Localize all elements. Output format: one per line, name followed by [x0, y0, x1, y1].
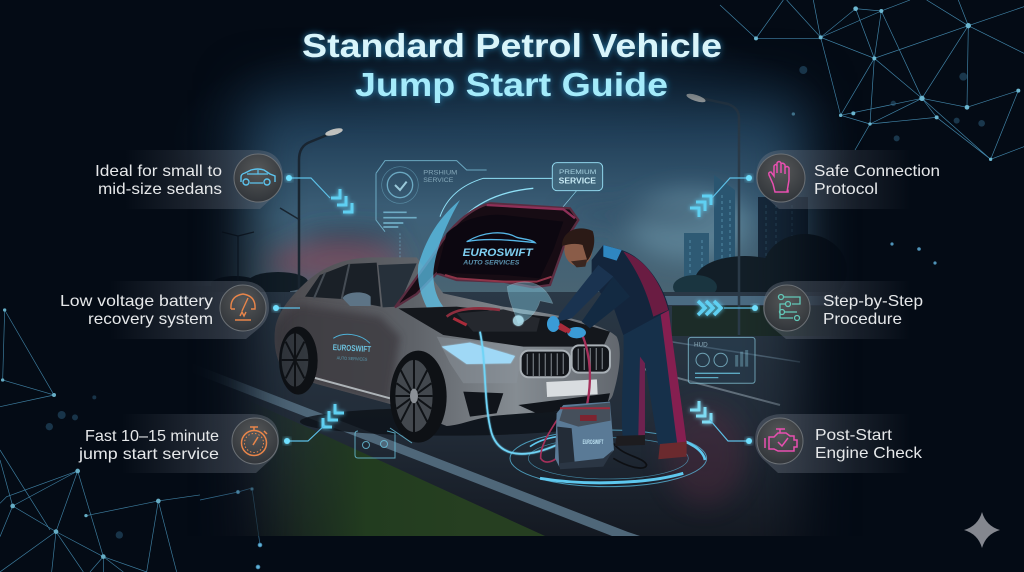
title: Jump Start Guide: [355, 66, 668, 103]
text: safe connection: [814, 163, 940, 198]
gloves: [547, 316, 560, 332]
lower intakes: [463, 392, 503, 417]
jump starter box: [555, 402, 614, 469]
lane line: [640, 368, 780, 405]
icon: gauge: [220, 285, 266, 331]
windshield: [378, 263, 417, 307]
street light right: [686, 92, 739, 335]
HUD panel: right gauges: [688, 337, 755, 383]
hood logo: [467, 233, 535, 243]
open hood: [395, 203, 578, 307]
icon: car: [234, 154, 282, 202]
chevrons: upper right: [690, 196, 711, 217]
HUD panel: right gauges: HUD: [694, 342, 708, 349]
front wheel: [390, 351, 447, 443]
panel: small to mid-size sedans: [95, 150, 283, 209]
floor rings: [510, 430, 707, 487]
road edge stripe: [222, 376, 640, 536]
grass: [281, 416, 544, 536]
engine bay: [398, 307, 610, 347]
holographic ribbon: [418, 200, 553, 326]
panel: low voltage battery: [60, 281, 269, 339]
body shading: [275, 305, 400, 404]
city buildings: [684, 175, 808, 283]
head: [564, 233, 592, 266]
text: sedans: [95, 163, 222, 198]
scene: roadside illustration: [214, 74, 834, 536]
central glow: [172, 15, 852, 265]
car shadow: [300, 408, 558, 436]
network: bottom centre-left dots: [200, 488, 294, 572]
road surface: [214, 292, 821, 536]
jump starter box: EUROSWIFT: [583, 439, 603, 446]
open hood: AUTO SERVICES: [462, 259, 520, 266]
building windows: [690, 195, 792, 280]
text: safe connection: Safe Connection: [814, 163, 940, 180]
car body: [275, 257, 620, 426]
text: fast: [78, 428, 219, 463]
chevrons: upper left: [331, 189, 352, 212]
chevrons: middle right: [698, 301, 721, 315]
side windows: [305, 263, 381, 307]
panel: step-by-step: [763, 281, 923, 339]
door logo: EUROSWIFT: [333, 342, 371, 354]
connector: left 2: [273, 305, 300, 311]
legs: [622, 307, 687, 445]
icon: stopwatch: [232, 418, 278, 464]
icon: engine: [757, 418, 803, 464]
arms: [557, 265, 613, 322]
HUD panel: premium service: [376, 160, 487, 258]
connector: right 3: [710, 420, 752, 444]
door logo: AUTO SERVICES: [337, 355, 368, 362]
engine red clamps: [453, 318, 567, 332]
text: engine check: Engine Check: [815, 445, 923, 462]
panel: engine check: [755, 414, 923, 473]
text: fast: Fast 10–15 minute: [85, 428, 219, 445]
number plate: [546, 379, 598, 397]
icon: glove: [757, 154, 805, 202]
HUD panel: premium service: PRSHIUM: [423, 169, 457, 176]
title: Standard Petrol Vehicle: [302, 27, 722, 64]
shoes: [615, 435, 645, 446]
text: battery: recovery system: [88, 311, 213, 328]
text: fast: jump start service: [78, 446, 219, 463]
door logo: [333, 334, 371, 362]
text: step-by-step: Procedure: [823, 311, 902, 328]
text: step-by-step: [823, 293, 923, 328]
technician: [547, 228, 687, 459]
tree line: [219, 234, 831, 292]
HUD badge: premium service: SERVICE: [559, 176, 597, 185]
rear wheel: [279, 327, 318, 395]
text: engine check: Post-Start: [815, 427, 893, 444]
car: [275, 200, 620, 443]
connector: right 2: [724, 305, 758, 311]
grille: [521, 345, 610, 377]
network: bottom left: [0, 308, 200, 572]
floor glow: [665, 405, 745, 505]
sky: [216, 74, 834, 292]
panel: safe connection: [756, 150, 940, 209]
text: safe connection: Protocol: [814, 181, 878, 198]
network: right middle dots: [890, 242, 937, 265]
icon: sparkle watermark: [964, 512, 1000, 548]
headlight: [442, 343, 515, 364]
open hood: EUROSWIFT: [463, 247, 534, 259]
text: step-by-step: Step-by-Step: [823, 293, 923, 310]
panel: fast service: [78, 414, 279, 473]
HUD badge: premium service: PREMIUM: [559, 169, 596, 176]
HUD badge: premium service: [440, 162, 604, 217]
connector: right 1: [712, 175, 752, 198]
torso: [592, 245, 669, 335]
dusk glow: [265, 190, 750, 280]
text: battery: Low voltage battery: [60, 293, 213, 310]
mirror: [343, 292, 371, 306]
text: engine check: [815, 427, 923, 462]
chevrons: lower left: [323, 404, 344, 427]
connector: left 1: [286, 175, 330, 198]
guard rail and hedge: [664, 296, 822, 363]
title: [302, 27, 722, 103]
text: sedans: mid-size sedans: [98, 181, 222, 198]
street light left: [222, 127, 343, 290]
icon: flow: [764, 285, 810, 331]
connector: left 3: [284, 425, 325, 444]
cables: [480, 332, 647, 468]
chevrons: lower right: [690, 401, 711, 422]
network: top right: [720, 0, 1024, 161]
text: sedans: Ideal for small to: [95, 163, 222, 180]
front panel highlight: [437, 336, 494, 383]
small HUD: bottom road: [355, 428, 412, 458]
HUD panel: premium service: SERVICE: [423, 177, 453, 184]
text: battery: [60, 293, 213, 328]
